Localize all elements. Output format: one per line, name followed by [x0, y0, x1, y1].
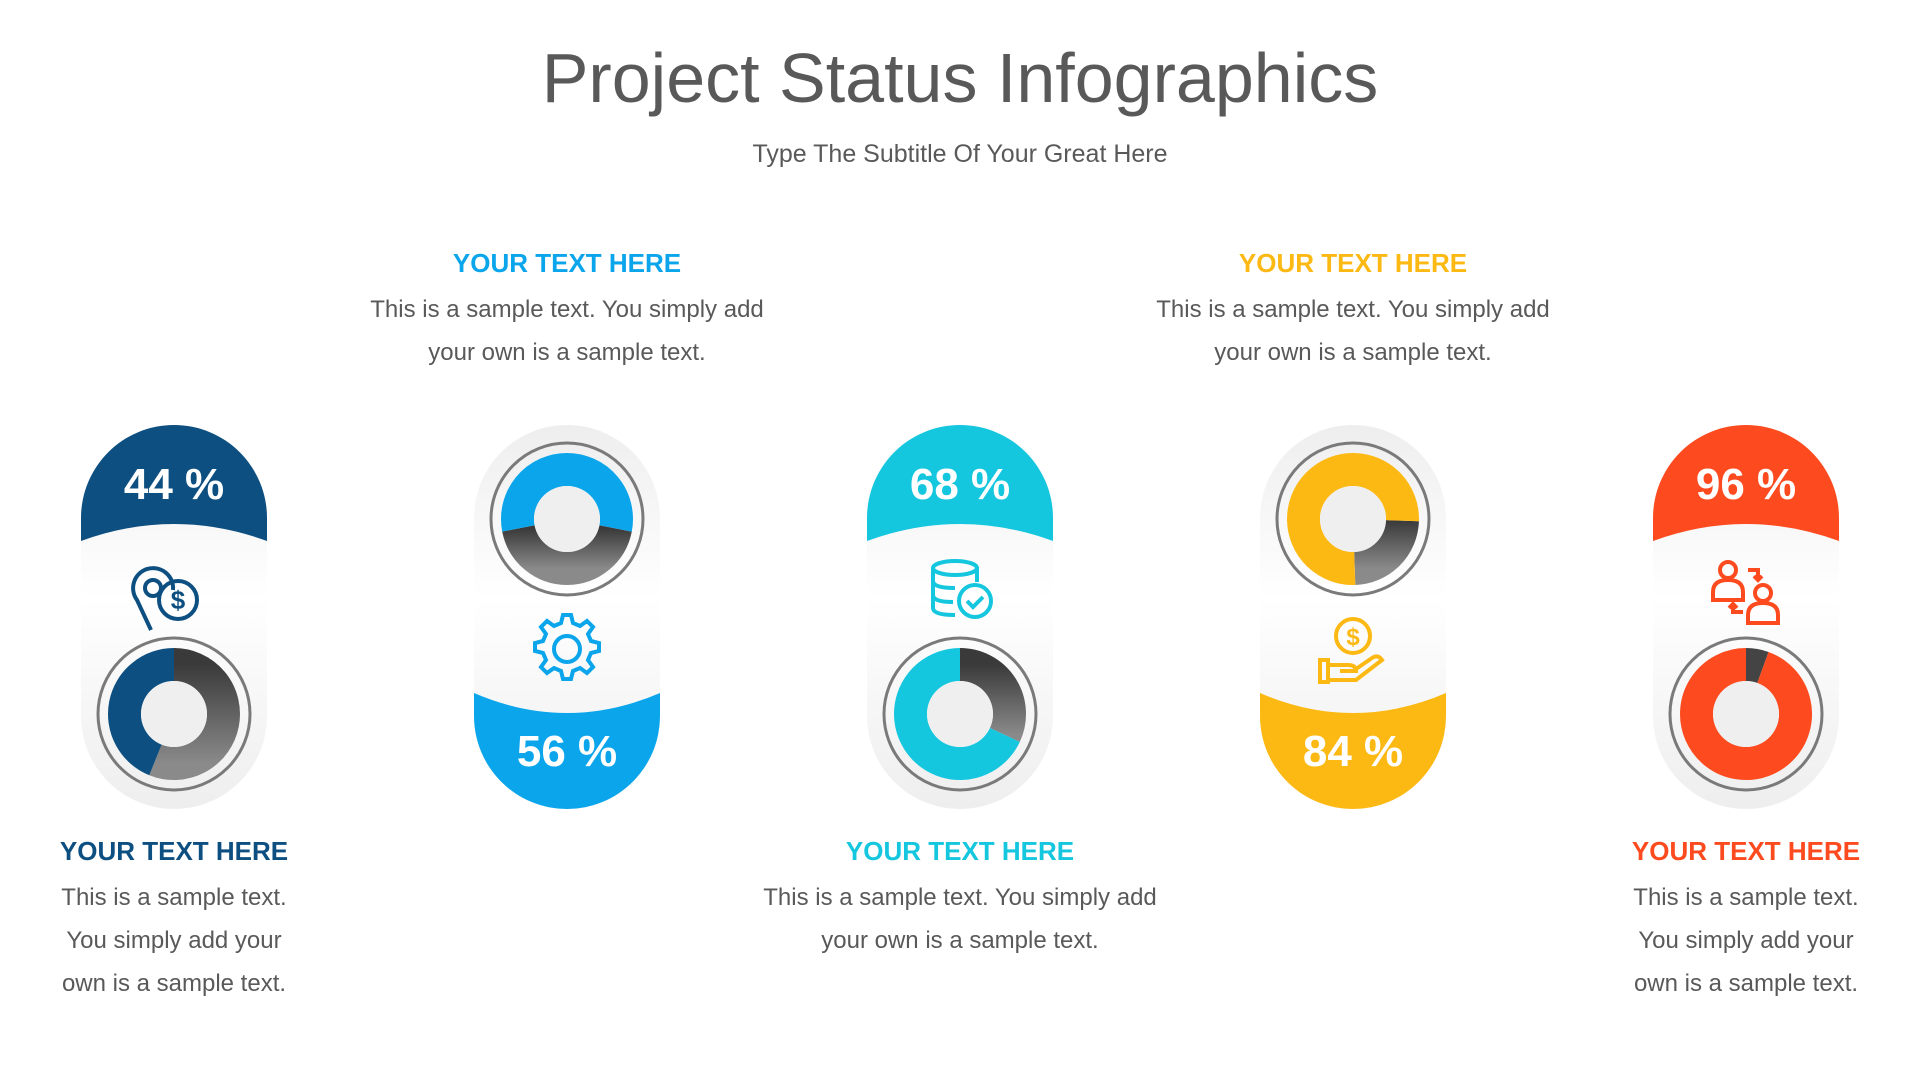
pill 1: 44% — [81, 425, 267, 809]
text block 5 (bottom): You simply add your — [1638, 927, 1854, 954]
text block 1 (bottom): You simply add your — [66, 927, 282, 954]
pill 2: 56% — [474, 425, 660, 809]
text block 5 (bottom): own is a sample text. — [1634, 970, 1858, 997]
title: Project Status Infographics — [542, 39, 1378, 117]
text block 5 (bottom) — [1632, 836, 1860, 997]
pill 3: 68% — [867, 425, 1053, 809]
text block 1 (bottom): YOUR TEXT HERE — [60, 836, 288, 866]
pill 4: 84%: $ — [1346, 624, 1360, 651]
text block 1 (bottom): This is a sample text. — [61, 884, 287, 911]
pill 1: 44%: 44 % — [124, 460, 224, 509]
text block 4 (top): YOUR TEXT HERE — [1239, 248, 1467, 278]
text block 1 (bottom): own is a sample text. — [62, 970, 286, 997]
pill 4: 84% — [1260, 425, 1446, 809]
pill 3: 68%: 68 % — [910, 460, 1010, 509]
text block 3 (bottom): YOUR TEXT HERE — [846, 836, 1074, 866]
text block 4 (top) — [1156, 248, 1550, 366]
text block 2 (top): YOUR TEXT HERE — [453, 248, 681, 278]
text block 2 (top): your own is a sample text. — [428, 339, 706, 366]
text block 1 (bottom) — [60, 836, 288, 997]
text block 5 (bottom): YOUR TEXT HERE — [1632, 836, 1860, 866]
text block 3 (bottom): This is a sample text. You simply add — [763, 884, 1157, 911]
pill 5: 96%: 96 % — [1696, 460, 1796, 509]
text block 5 (bottom): This is a sample text. — [1633, 884, 1859, 911]
text block 4 (top): your own is a sample text. — [1214, 339, 1492, 366]
pill 2: 56%: 56 % — [517, 727, 617, 776]
pill 5: 96% — [1653, 425, 1839, 809]
text block 3 (bottom): your own is a sample text. — [821, 927, 1099, 954]
text block 4 (top): This is a sample text. You simply add — [1156, 296, 1550, 323]
text block 2 (top) — [370, 248, 764, 366]
pill 1: 44%: $ — [171, 585, 186, 615]
text block 2 (top): This is a sample text. You simply add — [370, 296, 764, 323]
pill 4: 84%: 84 % — [1303, 727, 1403, 776]
text block 3 (bottom) — [763, 836, 1157, 954]
subtitle: Type The Subtitle Of Your Great Here — [752, 140, 1168, 168]
